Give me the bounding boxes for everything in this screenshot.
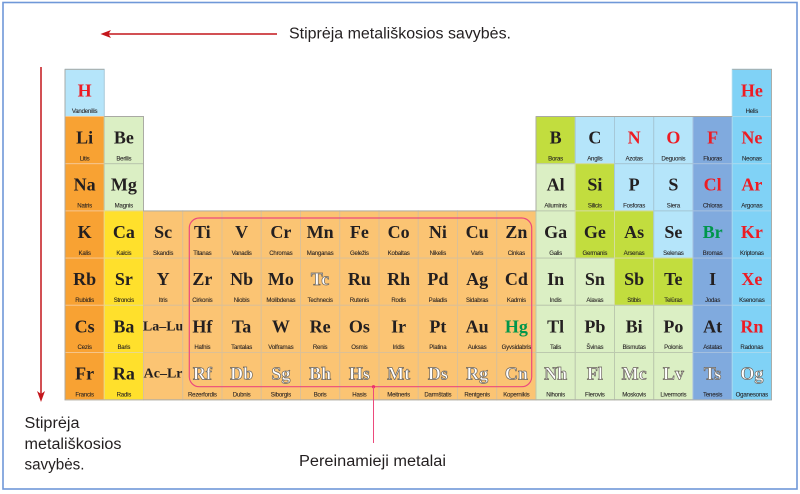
cell: Sg: Sg xyxy=(271,364,290,384)
cell: Fl: Flerovis xyxy=(585,391,605,398)
cell: H: Vandenilis xyxy=(72,108,98,115)
cell: S: Siera xyxy=(667,203,681,210)
cell: Rb xyxy=(65,258,104,305)
cell: At xyxy=(693,305,732,352)
cell: Rf xyxy=(183,352,222,400)
cell: K: Kalis xyxy=(79,250,91,257)
cell: Ds: Darmštatis xyxy=(424,391,451,398)
cell: In: Indis xyxy=(550,297,562,304)
cell: Ni: Ni xyxy=(429,222,447,242)
cell: V xyxy=(222,211,261,258)
cell: Xe: Xe xyxy=(741,269,762,289)
cell: Ga: Ga xyxy=(544,222,567,242)
cell: Ag: Sidabras xyxy=(466,297,488,304)
cell: Kr xyxy=(732,211,772,258)
cell: Fl xyxy=(575,352,614,400)
cell: I xyxy=(693,258,732,305)
cell: Tc xyxy=(300,258,340,305)
cell: Cl: Chloras xyxy=(703,203,722,210)
cell: P xyxy=(614,164,654,211)
cell: Pd: Paladis xyxy=(429,297,447,304)
cell: Li: Li xyxy=(76,128,93,148)
cell: Cr: Cr xyxy=(270,222,291,242)
cell: Be: Berilis xyxy=(116,155,132,162)
cell: Rg: Rg xyxy=(466,364,488,384)
cell: Se: Se xyxy=(664,222,682,242)
cell: Rf: Rezerfordis xyxy=(188,391,217,398)
cell: Rf: Rf xyxy=(193,364,213,384)
cell: Te: Te xyxy=(664,269,683,289)
cell: Rb: Rb xyxy=(73,269,96,289)
cell: S xyxy=(654,164,693,211)
cell: Lv xyxy=(654,352,693,400)
cell: Re: Renis xyxy=(313,344,328,351)
cell: Y: Itris xyxy=(159,297,168,304)
cell: Al xyxy=(536,164,575,211)
cell: Ar: Argonas xyxy=(741,203,763,210)
cell: Bi xyxy=(614,305,654,352)
cell: Ar xyxy=(732,164,772,211)
cell: Se xyxy=(654,211,693,258)
cell: Re: Re xyxy=(310,316,331,336)
cell: In: In xyxy=(547,269,564,289)
cell: Sc: Skandis xyxy=(153,250,173,257)
cell: Cn xyxy=(497,352,536,400)
cell: Nh xyxy=(536,352,575,400)
cell: N xyxy=(614,116,654,164)
cell: Pb: Švinas xyxy=(586,344,604,351)
cell: Ca: Ca xyxy=(113,222,135,242)
cell: N: N xyxy=(628,128,641,148)
cell: Ga xyxy=(536,211,575,258)
cell: Ge xyxy=(575,211,614,258)
cell: Zr: Cirkonis xyxy=(192,297,213,304)
cell: O xyxy=(654,116,693,164)
cell: Ds xyxy=(418,352,458,400)
cell: Db xyxy=(222,352,261,400)
cell: Cs: Cezis xyxy=(78,344,92,351)
cell: Mn xyxy=(300,211,340,258)
cell: Ts xyxy=(693,352,732,400)
cell: Re xyxy=(300,305,340,352)
cell: Mc: Mc xyxy=(622,364,647,384)
cell: Hg: Gyvsidabris xyxy=(502,344,531,351)
cell: Rh: Rodis xyxy=(391,297,406,304)
cell: Al: Aliuminis xyxy=(544,203,567,210)
periodic table xyxy=(65,69,772,400)
cell: Ag xyxy=(458,258,497,305)
cell: Kr: Kriptonas xyxy=(740,250,764,257)
cell: Og: Og xyxy=(740,364,763,384)
callout label: transition metals: Pereinamieji metalai xyxy=(299,453,446,470)
cell: At: At xyxy=(703,316,722,336)
cell: Bi: Bismutas xyxy=(622,344,646,351)
cell: Sg: Siborgis xyxy=(271,391,291,398)
cell: O: O xyxy=(666,128,680,148)
cell: Sb: Stibis xyxy=(627,297,641,304)
cell: Hg: Hg xyxy=(505,316,528,336)
cell: O: Deguonis xyxy=(661,155,686,162)
cell: Si: Silicis xyxy=(588,203,602,210)
cell: H: H xyxy=(78,80,92,100)
cell: Si: Si xyxy=(587,175,602,195)
cell: Li xyxy=(65,116,104,164)
cell: Cs: Cs xyxy=(75,316,95,336)
cell: La-Lu xyxy=(143,305,184,352)
cell: Ni: Nikelis xyxy=(430,250,446,257)
cell: Na xyxy=(65,164,104,211)
cell: Te: Telūras xyxy=(664,297,683,304)
cell: Mt xyxy=(379,352,418,400)
cell: I: Jodas xyxy=(705,297,720,304)
cell: Ba xyxy=(104,305,144,352)
cell: Cl: Cl xyxy=(704,175,722,195)
cell: K xyxy=(65,211,104,258)
cell: Mc: Moskovis xyxy=(622,391,646,398)
cell: In xyxy=(536,258,575,305)
cell: Ne xyxy=(732,116,772,164)
cell: Mg xyxy=(104,164,144,211)
cell: Sr: Sr xyxy=(115,269,133,289)
left label: metallic properties: savybės. xyxy=(24,456,84,474)
cell: Ne: Ne xyxy=(741,128,762,148)
cell: Sc xyxy=(144,211,183,258)
cell: C: Anglis xyxy=(587,155,603,162)
cell: Lv: Lv xyxy=(663,364,684,384)
cell: B xyxy=(536,116,575,164)
cell: Sn xyxy=(575,258,614,305)
cell: Ac-Lr: Ac–Lr xyxy=(144,366,183,382)
cell: Nh: Nihonis xyxy=(546,391,565,398)
cell: Ta: Ta xyxy=(232,316,251,336)
cell: Nb: Niobis xyxy=(234,297,250,304)
cell: Cn: Kopernikis xyxy=(503,391,530,398)
cell: Bh xyxy=(300,352,340,400)
cell: He: Helis xyxy=(746,108,758,115)
cell: Mt: Mt xyxy=(387,364,410,384)
cell: Br xyxy=(693,211,732,258)
cell: Ir: Ir xyxy=(391,316,406,336)
cell: At: Astatas xyxy=(703,344,722,351)
cell: Zn xyxy=(497,211,536,258)
cell: Fe: Fe xyxy=(350,222,369,242)
cell: Fl: Fl xyxy=(587,364,603,384)
cell: Zn: Cinkas xyxy=(508,250,525,257)
cell: Au: Au xyxy=(466,316,489,336)
cell: Ir xyxy=(379,305,418,352)
cell: C xyxy=(575,116,614,164)
cell: Os: Osmis xyxy=(351,344,368,351)
cell: Cs xyxy=(65,305,104,352)
cell: Cl xyxy=(693,164,732,211)
cell: Cu: Varis xyxy=(471,250,483,257)
cell: Ta xyxy=(222,305,261,352)
cell: Mo: Molibdenas xyxy=(266,297,296,304)
cell: Po: Polonis xyxy=(664,344,683,351)
callout leader: transition metals xyxy=(372,385,375,443)
cell: Si xyxy=(575,164,614,211)
cell: Hs: Hs xyxy=(349,364,370,384)
cell: Sr xyxy=(104,258,144,305)
cell: Rg xyxy=(458,352,497,400)
cell: Pd: Pd xyxy=(427,269,448,289)
cell: Ra: Ra xyxy=(113,364,135,384)
cell: Nb xyxy=(222,258,261,305)
cell: Hs xyxy=(340,352,379,400)
cell: Pb: Pb xyxy=(584,316,605,336)
cell: Nh: Nh xyxy=(544,364,567,384)
cell: Ts: Ts xyxy=(704,364,721,384)
left label: metallic properties: metališkosios xyxy=(24,436,122,453)
cell: Fr xyxy=(65,352,104,400)
transition metals outline xyxy=(189,218,532,387)
top label: metallic properties: Stiprėja metališkosios savybės. xyxy=(289,26,511,42)
cell: P: P xyxy=(629,175,640,195)
cell: Sr: Stroncis xyxy=(114,297,134,304)
cell: Fr: Fr xyxy=(75,364,94,384)
cell: Rn: Rn xyxy=(740,316,763,336)
cell: Cd: Cd xyxy=(505,269,528,289)
cell: Po: Po xyxy=(663,316,683,336)
cell: Cd xyxy=(497,258,536,305)
cell: Ni xyxy=(418,211,458,258)
cell: Rn xyxy=(732,305,772,352)
cell: W: Volframas xyxy=(268,344,294,351)
cell: Ga: Galis xyxy=(549,250,562,257)
cell: Fr: Francis xyxy=(75,391,94,398)
cell: Li: Litis xyxy=(80,155,90,162)
cell: Ge: Ge xyxy=(584,222,606,242)
cell: Ds: Ds xyxy=(428,364,448,384)
cell: Rn: Radonas xyxy=(740,344,763,351)
cell: Sc: Sc xyxy=(154,222,172,242)
cell: Pt xyxy=(418,305,458,352)
cell: B: B xyxy=(550,128,562,148)
cell: Sn: Sn xyxy=(585,269,605,289)
cell: Cu: Cu xyxy=(466,222,489,242)
cell: Tc: Tc xyxy=(311,269,329,289)
cell: Rh: Rh xyxy=(387,269,410,289)
cell: Zn: Zn xyxy=(505,222,527,242)
cell: Sg xyxy=(261,352,300,400)
cell: Nb: Nb xyxy=(230,269,253,289)
cell: Ca: Kalcis xyxy=(116,250,131,257)
cell: Ta: Tantalas xyxy=(231,344,252,351)
cell: Ne: Neonas xyxy=(742,155,762,162)
cell: Se: Selenas xyxy=(663,250,684,257)
cell: Rg: Rentgenis xyxy=(464,391,490,398)
cell: Mo xyxy=(261,258,300,305)
cell: Tl xyxy=(536,305,575,352)
cell: Mg: Mg xyxy=(111,175,137,195)
arrow: down xyxy=(37,67,45,402)
cell: Au: Auksas xyxy=(468,344,487,351)
cell: Zr xyxy=(183,258,222,305)
cell: Zr: Zr xyxy=(192,269,212,289)
cell: Be: Be xyxy=(114,128,134,148)
cell: Ag: Ag xyxy=(466,269,488,289)
cell: F: Fluoras xyxy=(703,155,722,162)
cell: V: Vanadis xyxy=(232,250,252,257)
cell: Ge: Germanis xyxy=(583,250,607,257)
cell: Pb xyxy=(575,305,614,352)
cell: As: Arsenas xyxy=(624,250,645,257)
cell: Co: Co xyxy=(388,222,410,242)
cell: Br: Bromas xyxy=(703,250,723,257)
cell: Po xyxy=(654,305,693,352)
cell: Hf: Hafnis xyxy=(194,344,210,351)
cell: Y xyxy=(144,258,183,305)
cell: La-Lu: La–Lu xyxy=(143,319,184,334)
cell: Xe xyxy=(732,258,772,305)
cell: Cr: Chromas xyxy=(269,250,293,257)
cell: Be xyxy=(104,116,144,164)
cell: Na: Na xyxy=(74,175,96,195)
cell: B: Boras xyxy=(548,155,563,162)
cell: Mn: Mn xyxy=(307,222,334,242)
cell: Ts: Tenesis xyxy=(703,391,722,398)
cell: Sb: Sb xyxy=(624,269,644,289)
cell: Ru xyxy=(340,258,379,305)
cell: Fe: Geležis xyxy=(350,250,369,257)
cell: Au xyxy=(458,305,497,352)
cell: Db: Dubnis xyxy=(233,391,251,398)
cell: Ca xyxy=(104,211,144,258)
cell: Ra xyxy=(104,352,144,400)
cell: Tl: Tl xyxy=(547,316,564,336)
cell: Os xyxy=(340,305,379,352)
cell: Bh: Bh xyxy=(309,364,331,384)
cell: Co xyxy=(379,211,418,258)
cell: Ti xyxy=(183,211,222,258)
cell: I: I xyxy=(709,269,716,289)
cell: Rh xyxy=(379,258,418,305)
cell: S: S xyxy=(668,175,678,195)
cell: K: K xyxy=(78,222,92,242)
cell: Mt: Meitneris xyxy=(387,391,410,398)
cell: Pt: Pt xyxy=(429,316,446,336)
cell: Os: Os xyxy=(349,316,370,336)
cell: F: F xyxy=(707,128,718,148)
cell: Co: Kobaltas xyxy=(388,250,410,257)
cell: Ra: Radis xyxy=(117,391,131,398)
left label: metallic properties: Stiprėja xyxy=(24,415,80,432)
cell: Mc xyxy=(614,352,654,400)
cell: Cd: Kadmis xyxy=(507,297,526,304)
cell: Ac-Lr xyxy=(144,352,183,400)
cell: Kr: Kr xyxy=(741,222,763,242)
cell: Ru: Ru xyxy=(348,269,371,289)
cell: W: W xyxy=(272,316,290,336)
cell: C: C xyxy=(588,128,601,148)
cell: Rb: Rubidis xyxy=(75,297,94,304)
cell: Tc: Technecis xyxy=(308,297,333,304)
cell: Xe: Ksenonas xyxy=(739,297,765,304)
cell: Sb xyxy=(614,258,654,305)
cell: Ba: Baris xyxy=(117,344,130,351)
arrow: left xyxy=(100,30,277,38)
cell: Fe xyxy=(340,211,379,258)
cell: Sn: Alavas xyxy=(586,297,604,304)
cell: Ti: Titanas xyxy=(193,250,212,257)
cell: Cu xyxy=(458,211,497,258)
cell: Pt: Platina xyxy=(429,344,447,351)
cell: Al: Al xyxy=(547,175,565,195)
cell: N: Azotas xyxy=(625,155,643,162)
cell: Ru: Rutenis xyxy=(350,297,369,304)
cell: Tl: Talis xyxy=(550,344,561,351)
cell: Br: Br xyxy=(703,222,723,242)
cell: Og xyxy=(732,352,772,400)
cell: Lv: Livermoris xyxy=(660,391,686,398)
cell: Bh: Boris xyxy=(314,391,327,398)
cell: Hs: Hasis xyxy=(352,391,367,398)
cell: He xyxy=(732,69,772,116)
cell: Mg: Magnis xyxy=(115,203,133,210)
cell: As xyxy=(614,211,654,258)
cell: Hf: Hf xyxy=(192,316,213,336)
cell: F xyxy=(693,116,732,164)
cell: Pd xyxy=(418,258,458,305)
cell: H xyxy=(65,69,104,116)
cell: Og: Oganesonas xyxy=(736,391,768,398)
cell: Cn: Cn xyxy=(505,364,528,384)
cell: Ir: Iridis xyxy=(393,344,405,351)
cell: He: He xyxy=(741,80,763,100)
cell: P: Fosforas xyxy=(623,203,645,210)
cell: Mn: Manganas xyxy=(307,250,334,257)
cell: Cr xyxy=(261,211,300,258)
cell: W xyxy=(261,305,300,352)
cell: Hg xyxy=(497,305,536,352)
cell: Db: Db xyxy=(230,364,253,384)
cell: Na: Natris xyxy=(77,203,92,210)
cell: Mo: Mo xyxy=(268,269,294,289)
cell: Ba: Ba xyxy=(113,316,134,336)
cell: As: As xyxy=(624,222,644,242)
cell: Te xyxy=(654,258,693,305)
cell: Hf xyxy=(183,305,222,352)
cell: Ar: Ar xyxy=(741,175,762,195)
cell: Y: Y xyxy=(157,269,170,289)
cell: Bi: Bi xyxy=(626,316,643,336)
left label: metallic properties xyxy=(24,415,122,474)
cell: Ti: Ti xyxy=(194,222,211,242)
cell: V: V xyxy=(235,222,248,242)
